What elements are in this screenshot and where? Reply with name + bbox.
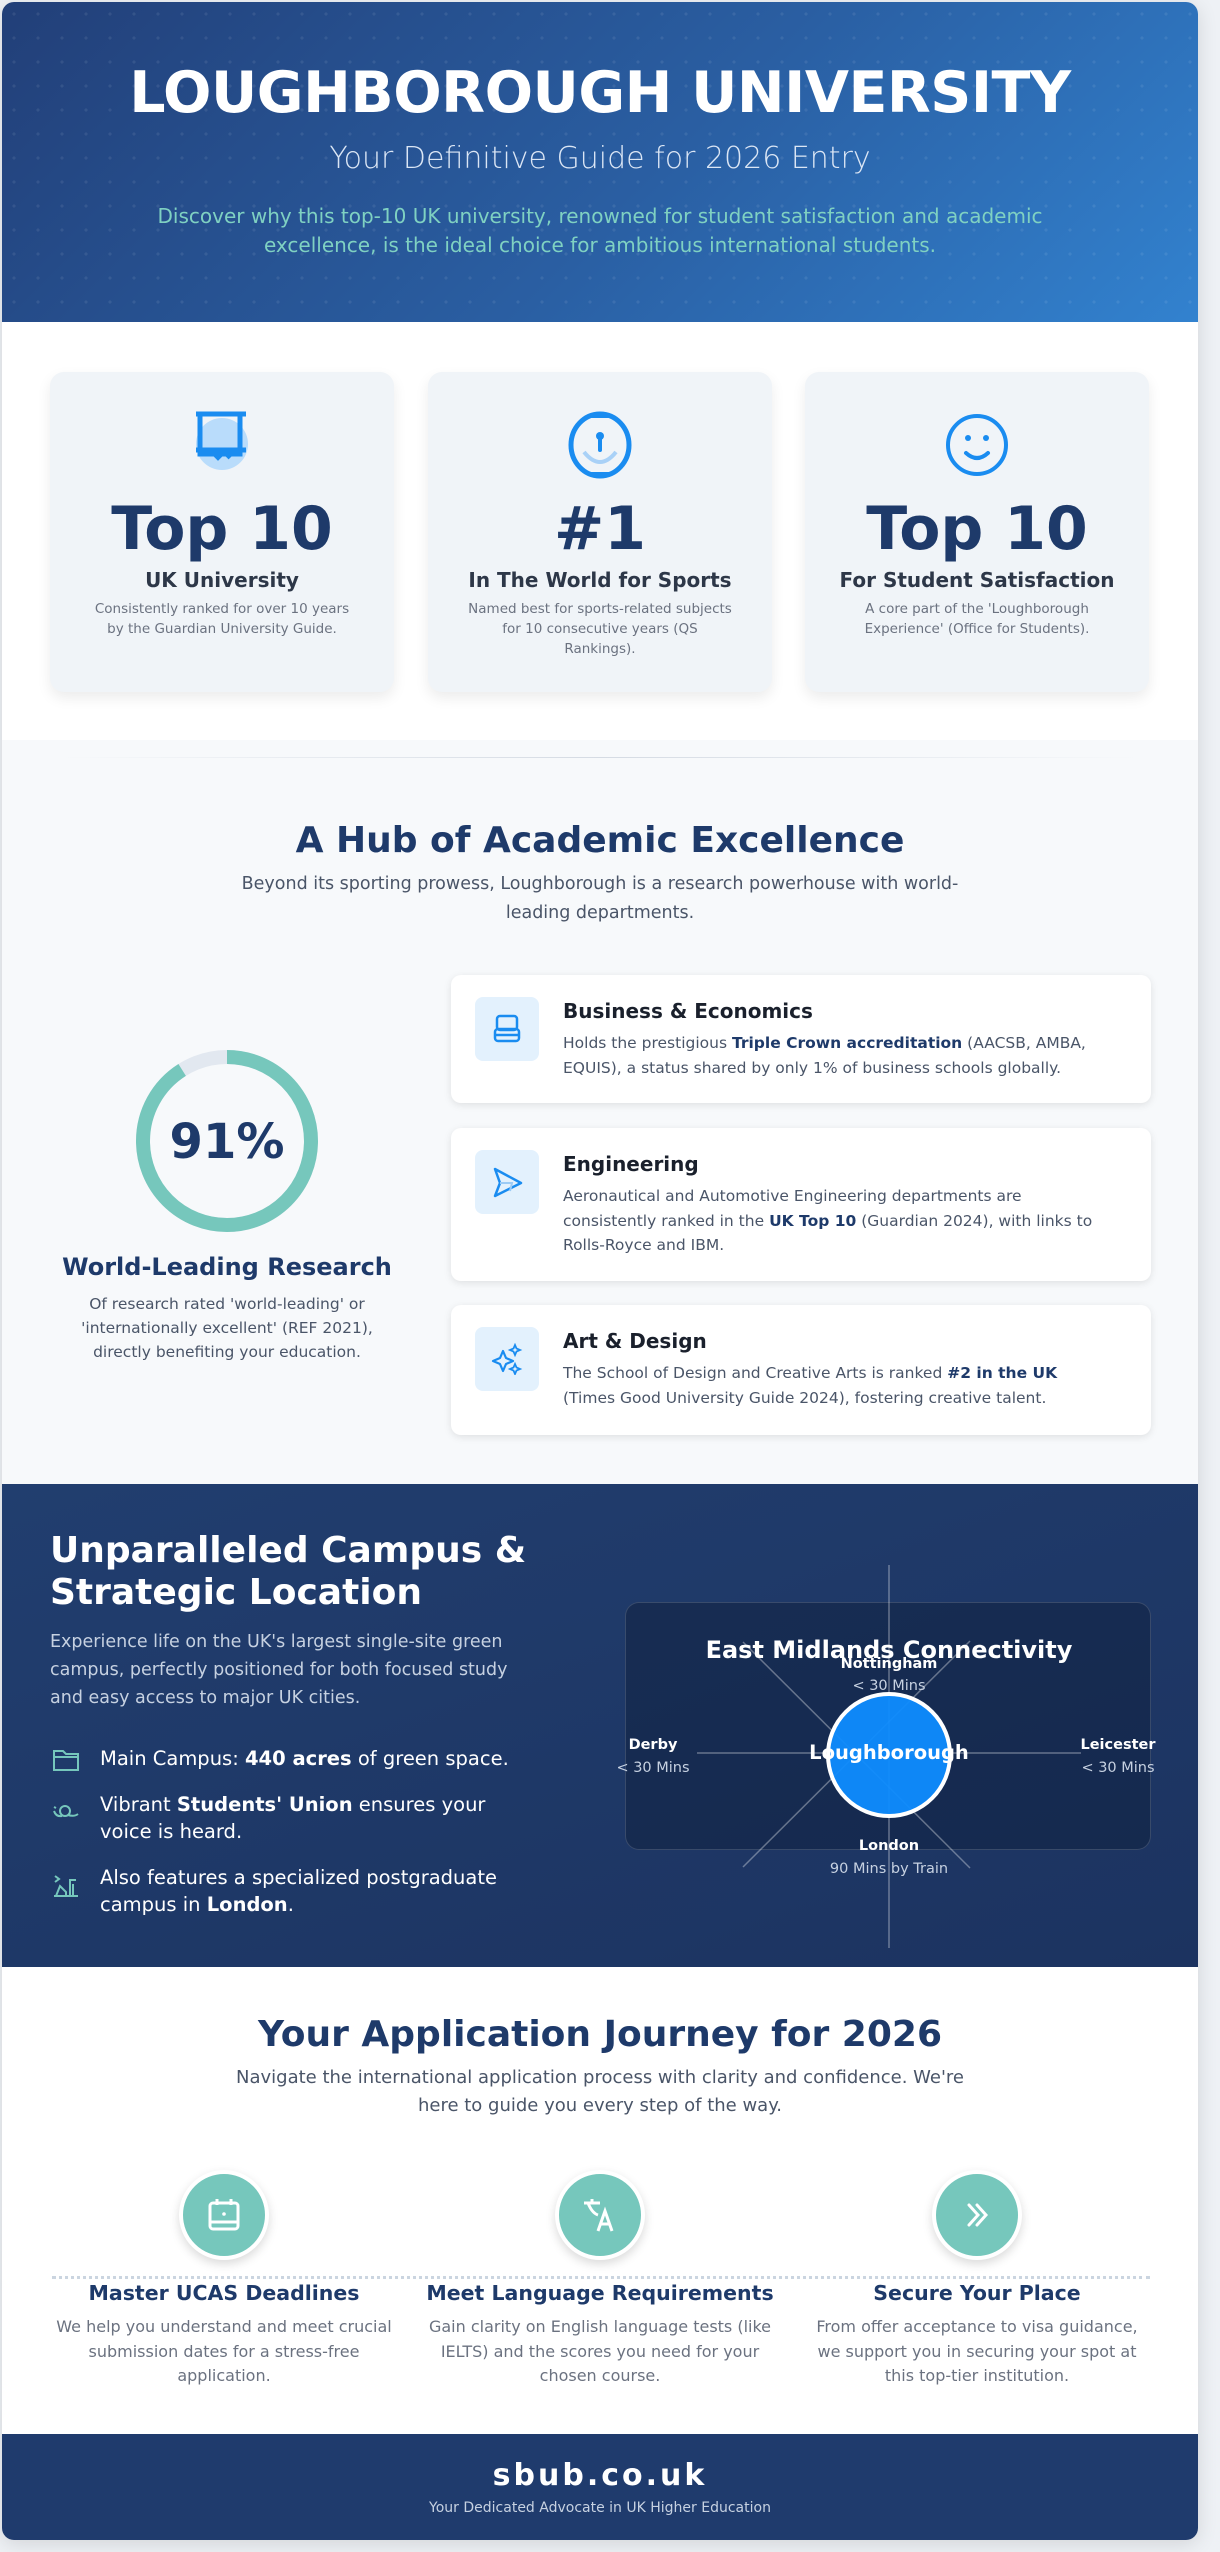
dept card: Art & Design: The School of Design and Creative Arts is ranked #2 in the UK (Times Good University Guide 2024), fostering creative talent. xyxy=(563,1364,1057,1406)
text: Gain clarity on English language tests (like IELTS) and the scores you need for your chosen course. xyxy=(429,2317,771,2385)
hub: Loughborough xyxy=(826,1692,952,1818)
icon: translate xyxy=(555,2170,645,2260)
intro text: Discover why this top-10 UK university, renowned for student satisfaction and academic excellence, is the ideal choice for ambitious international students. xyxy=(158,204,1042,257)
city: London: London xyxy=(859,1838,919,1854)
journey intro: Navigate the international application process with clarity and confidence. We're here to guide you every step of the way. xyxy=(236,2067,964,2116)
heading: Unparalleled Campus & Strategic Location xyxy=(50,1530,526,1613)
city: Leicester: < 30 Mins xyxy=(1081,1760,1155,1776)
icon: chevrons xyxy=(932,2170,1022,2260)
research text: Of research rated 'world-leading' or 'internationally excellent' (REF 2021), directly benefiting your education. xyxy=(81,1295,373,1361)
city: Leicester: Leicester xyxy=(1080,1737,1156,1753)
dept card: Art & Design: Art & Design xyxy=(563,1329,707,1353)
stat card: Top 10 UK University: Consistently ranked for over 10 years by the Guardian University Guide. xyxy=(95,601,349,637)
text: From offer acceptance to visa guidance, we support you in securing your spot at this top-tier institution. xyxy=(816,2317,1138,2385)
section: application journey heading: Your Application Journey for 2026 xyxy=(258,2014,942,2055)
stat card: Top 10 UK University: UK University xyxy=(145,568,299,592)
dept card: Engineering xyxy=(451,1128,1151,1281)
stat card: #1 Sports: Named best for sports-related subjects xyxy=(468,601,732,617)
city: Derby: Derby xyxy=(629,1737,677,1753)
map: East Midlands connectivity: Loughborough xyxy=(809,1741,969,1764)
icon: sparkles xyxy=(475,1327,539,1391)
stat card: Top 10 Satisfaction: Top 10 xyxy=(866,494,1088,564)
dept card: Engineering: consistently ranked in the UK Top 10 (Guardian 2024), with links to Rolls-Royce and IBM. xyxy=(563,1212,1092,1254)
dept card: Business xyxy=(451,975,1151,1103)
stat card: Top 10 Satisfaction: A core part of the 'Loughborough Experience' (Office for Students). xyxy=(865,601,1089,637)
text: Secure Your Place xyxy=(873,2281,1081,2305)
icon: briefcase xyxy=(475,997,539,1061)
stat card: Top 10 Satisfaction xyxy=(805,372,1149,692)
stat card: #1 Sports: for 10 consecutive years (QS xyxy=(502,621,698,637)
dept card: Engineering: Aeronautical and Automotive Engineering departments are xyxy=(563,1187,1022,1205)
title: LOUGHBOROUGH UNIVERSITY xyxy=(129,60,1071,126)
text: Master UCAS Deadlines xyxy=(88,2281,360,2305)
section: campus & location xyxy=(2,1484,1198,1967)
subtitle: Your Definitive Guide for 2026 Entry xyxy=(329,141,871,176)
icon: paper plane xyxy=(475,1150,539,1214)
city: Derby: < 30 Mins xyxy=(616,1760,690,1776)
stat card: #1 Sports: In The World for Sports xyxy=(468,568,732,592)
heading: A Hub of Academic Excellence xyxy=(296,820,904,861)
intro paragraph: Experience life on the UK's largest single-site green campus, perfectly positioned for both focused study and easy access to major UK cities. xyxy=(50,1632,507,1708)
city: Derby xyxy=(616,1737,690,1776)
dept card: Business: Business & Economics xyxy=(563,999,813,1023)
stat card: #1 Sports xyxy=(428,372,772,692)
ring chart 91% xyxy=(136,1050,318,1232)
stat card: Top 10 UK University: Top 10 xyxy=(111,494,333,564)
city: Nottingham: Nottingham xyxy=(841,1656,937,1672)
dept card: Art & Design xyxy=(451,1305,1151,1435)
footer xyxy=(2,2434,1198,2540)
map: East Midlands connectivity xyxy=(616,1565,1156,1948)
city: Leicester xyxy=(1080,1737,1156,1776)
ring chart 91%: 91% xyxy=(170,1114,284,1170)
dept card: Business: Holds the prestigious Triple Crown accreditation (AACSB, AMBA, EQUIS), a status shared by only 1% of business schools globally. xyxy=(563,1034,1086,1076)
research heading: World-Leading Research xyxy=(62,1253,392,1281)
city: London: 90 Mins by Train xyxy=(830,1861,948,1877)
text: Meet Language Requirements xyxy=(426,2281,774,2305)
city: Nottingham xyxy=(841,1656,937,1694)
step 1 xyxy=(56,2174,392,2385)
list item: London campus: Also features a specialized postgraduate campus in London. xyxy=(100,1866,497,1916)
icon: smiley xyxy=(946,414,1008,476)
section: academic excellence xyxy=(2,740,1198,1484)
dept card: Engineering: Engineering xyxy=(563,1152,699,1176)
stat card: Top 10 Satisfaction: For Student Satisfaction xyxy=(840,568,1114,592)
map title: East Midlands Connectivity xyxy=(706,1636,1072,1664)
city: London xyxy=(830,1838,948,1877)
text: We help you understand and meet crucial submission dates for a stress-free application. xyxy=(56,2317,392,2385)
list item: union: Vibrant Students' Union ensures your voice is heard. xyxy=(100,1793,485,1843)
footer tagline: Your Dedicated Advocate in UK Higher Education xyxy=(429,2500,771,2516)
city: Nottingham: < 30 Mins xyxy=(852,1678,926,1694)
list item: campus: Main Campus: 440 acres of green space. xyxy=(100,1747,509,1770)
icon: trophy xyxy=(196,412,248,470)
icon: calendar xyxy=(179,2170,269,2260)
stat card: Top 10 UK University xyxy=(50,372,394,692)
intro: Beyond its sporting prowess, Loughborough is a research powerhouse with world-leading departments. xyxy=(242,874,958,923)
header banner xyxy=(2,2,1198,322)
step 3 xyxy=(816,2174,1138,2385)
stat card: #1 Sports: Rankings). xyxy=(564,641,636,657)
step 2 xyxy=(426,2174,774,2385)
icon: stopwatch xyxy=(568,412,632,478)
stat card: #1 Sports: #1 xyxy=(554,494,646,564)
footer brand: sbub.co.uk xyxy=(493,2458,707,2493)
